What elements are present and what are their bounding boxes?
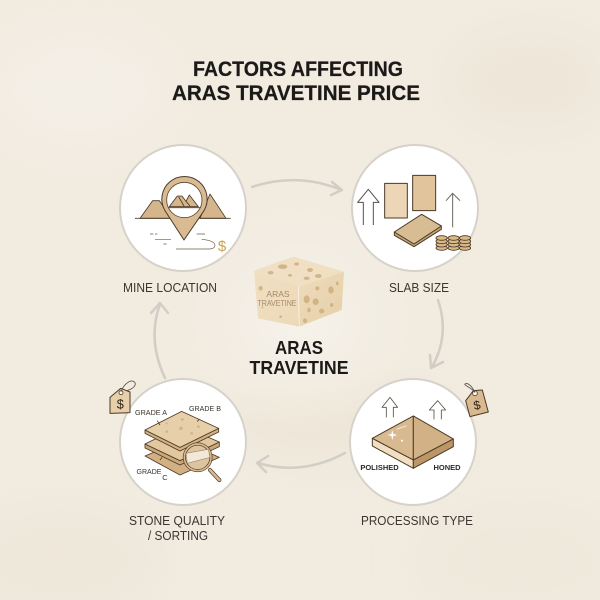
stone engraved label: TRAVETINE [258, 298, 297, 308]
icon: price tag right: $ [472, 398, 482, 413]
label: stone quality: / SORTING [148, 529, 208, 543]
icon: price tag left: $ [117, 398, 124, 412]
grade labels: GRADE A [135, 408, 167, 417]
label: polished: POLISHED [360, 463, 399, 472]
grade labels: GRADE B [189, 404, 221, 413]
label: mine location: MINE LOCATION [123, 281, 217, 295]
icon: slabs and coins [358, 175, 471, 250]
icon: price tag left [110, 381, 135, 413]
central stone: aras travetine block [254, 257, 344, 327]
center heading: TRAVETINE [250, 358, 348, 378]
label: slab size: SLAB SIZE [389, 281, 449, 295]
icon: split polished and honed slab [372, 397, 453, 468]
center heading: ARAS [275, 338, 323, 358]
title: FACTORS AFFECTING [193, 58, 403, 81]
panel: mine location [120, 145, 246, 271]
stone engraved label [258, 289, 297, 308]
arrow: mine location to slab size [252, 180, 342, 195]
grade labels: GRADE [136, 467, 162, 476]
grade labels [135, 404, 221, 482]
center heading [250, 338, 348, 378]
icon: map pin with mountains [135, 176, 231, 249]
arrow: stone quality to mine location [151, 303, 168, 378]
panel: processing type [350, 379, 476, 505]
icon: graded stone layers with magnifier [145, 411, 219, 480]
arrow: processing type to stone quality [257, 453, 345, 472]
stone engraved label: ARAS [266, 289, 290, 299]
panel: slab size [352, 145, 478, 271]
label: stone quality: STONE QUALITY [129, 514, 226, 528]
icon: dollar sign: $ [218, 238, 227, 255]
label: processing type: PROCESSING TYPE [361, 514, 473, 528]
title [172, 58, 420, 105]
label: stone quality [129, 514, 226, 543]
title: ARAS TRAVETINE PRICE [172, 82, 420, 105]
grade labels: C [162, 473, 168, 482]
arrow: slab size to processing type [430, 300, 443, 368]
icon: price tag right [465, 384, 488, 417]
label: honed: HONED [433, 463, 461, 472]
panel: stone quality [120, 379, 246, 505]
